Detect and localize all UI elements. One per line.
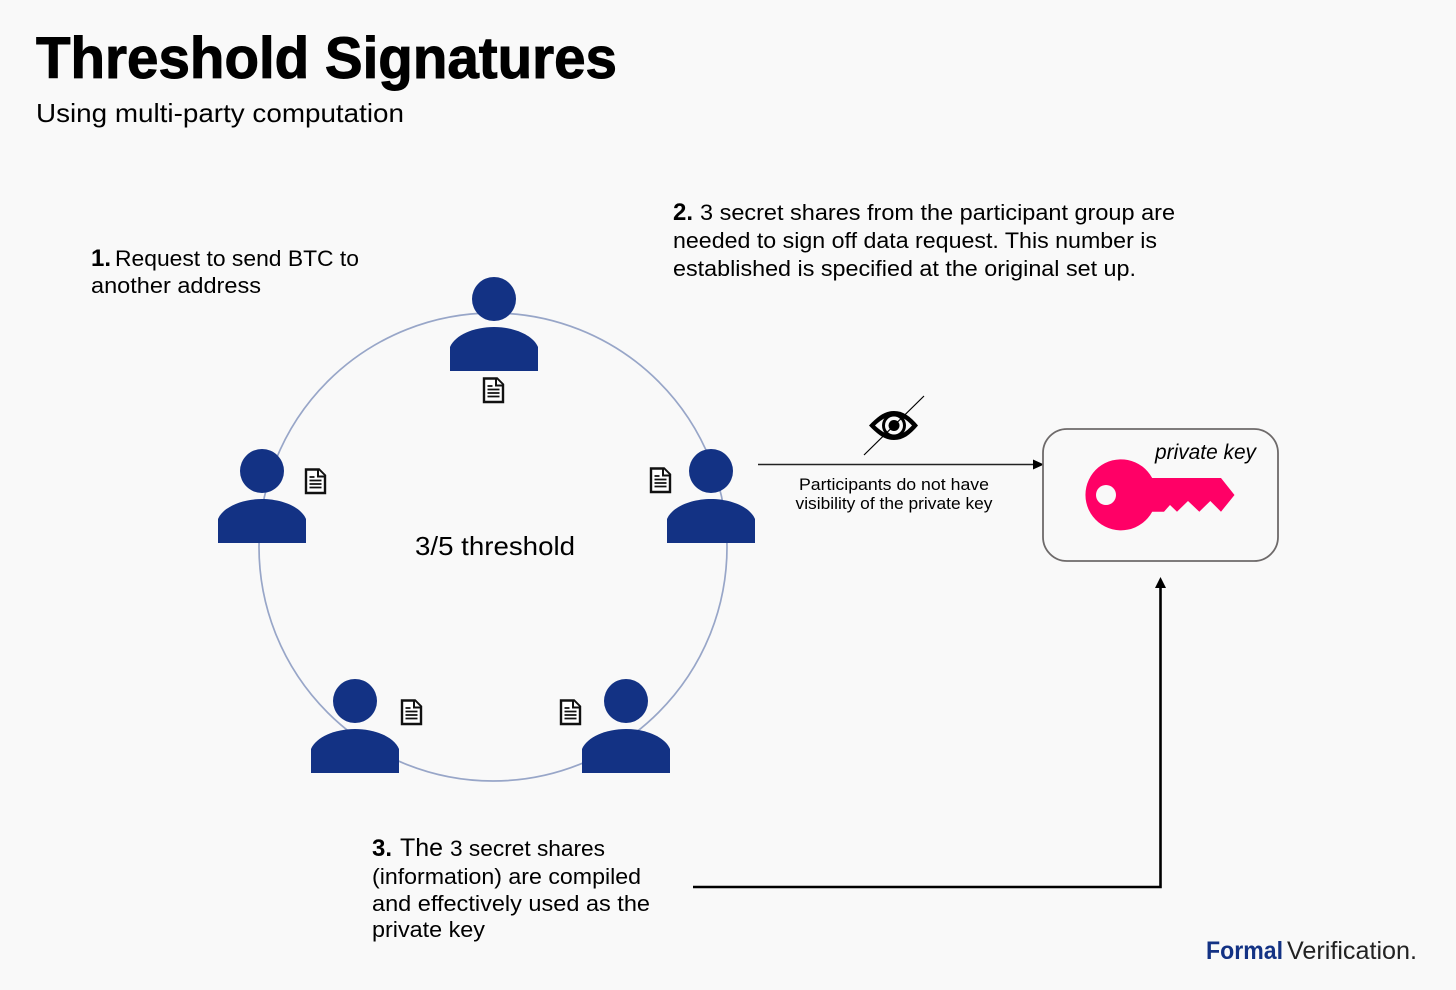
participant: top [450,277,538,371]
title: Threshold Signatures [36,26,617,91]
step 2 text [673,199,1175,281]
icon: document bottom left [402,700,421,724]
step 2 text: established is specified at the original set up. [673,256,1136,281]
icon: document top [484,378,503,402]
icon: key [1085,459,1234,530]
step 3 text: 3. [372,835,392,862]
visibility note: Participants do not have [799,476,989,494]
step 1 text [91,245,359,298]
icon: crossed-out eye [864,396,924,455]
participant: bottom right [582,679,670,773]
step 1 text: another address [91,273,261,298]
icon: document bottom right [561,700,580,724]
subtitle: Using multi-party computation [36,98,404,128]
step 3 text: The [400,834,443,862]
step 3 text: private key [372,917,486,942]
logo: Formal [1206,937,1283,965]
step 3 text: and effectively used as the [372,891,650,916]
logo: Verification. [1287,937,1417,965]
private key label: private key [1154,441,1257,464]
visibility note: visibility of the private key [796,495,993,513]
step 2 text: needed to sign off data request. This number is [673,228,1157,253]
icon: document left [306,470,325,493]
step 2 text: 2. [673,199,693,226]
step 1 text: Request to send BTC to [115,246,359,271]
visibility note [796,476,993,513]
participant ring [259,313,727,781]
step 1 text: 1. [91,245,111,272]
participant: right [667,449,755,543]
panel: private key box [1043,429,1278,561]
arrow from step 3 to private key [693,577,1166,887]
step 3 text: (information) are compiled [372,864,641,889]
step 3 text [372,834,650,942]
icon: document right [651,468,670,492]
step 3 text: 3 secret shares [450,836,605,861]
arrow to private key [758,460,1044,470]
participant: bottom left [311,679,399,773]
step 2 text: 3 secret shares from the participant group are [700,200,1175,225]
participant: left [218,449,306,543]
threshold label: 3/5 threshold [415,531,575,561]
